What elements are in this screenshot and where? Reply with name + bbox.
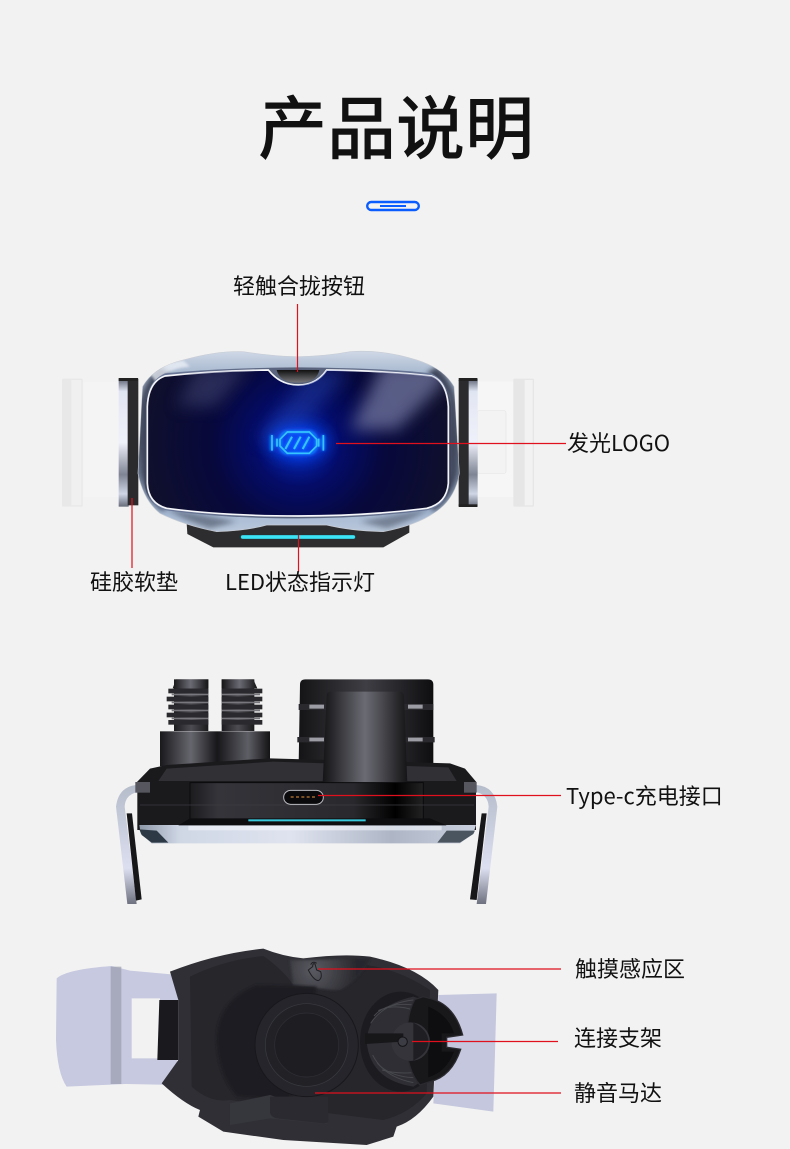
USB Type-C port — [284, 790, 323, 804]
product: back view — [56, 949, 497, 1145]
top bevel — [158, 762, 457, 781]
left clamp — [56, 966, 178, 1087]
glass reflections — [178, 370, 446, 440]
inner body plane — [190, 956, 430, 1120]
body neck — [217, 985, 317, 1100]
line: Type-c — [318, 794, 561, 796]
label: logo: 发光LOGO — [567, 426, 670, 458]
right clip arm — [464, 782, 497, 904]
threaded connector — [360, 992, 463, 1092]
left pad strip — [157, 1000, 178, 1060]
line: LED indicator — [298, 535, 300, 572]
label: connection: 连接支架 — [574, 1021, 662, 1053]
left clip arm — [116, 782, 150, 904]
touch ridge — [290, 958, 370, 990]
LED indicator strip — [241, 535, 355, 539]
label: silicone pad: 硅胶软垫 — [90, 565, 178, 597]
line: touch button — [296, 304, 298, 372]
right clamp — [433, 993, 497, 1112]
product: side view — [116, 679, 497, 904]
line: silicone pad — [131, 498, 133, 568]
title: 产品说明 — [258, 73, 534, 173]
touch close button — [277, 370, 319, 383]
line: connection — [412, 1040, 558, 1042]
panel seam — [140, 804, 474, 806]
title accent icon — [367, 202, 419, 210]
front cylinder — [323, 692, 407, 783]
left soft pad — [119, 378, 138, 507]
glowing LOGO icon — [270, 427, 327, 459]
touch icon — [308, 962, 321, 981]
post collar — [160, 731, 270, 766]
silver body shell — [138, 351, 459, 532]
left white clamp — [62, 379, 120, 507]
right white clamp — [477, 379, 534, 507]
shell dark rim — [145, 367, 451, 518]
body top — [137, 758, 476, 830]
threaded posts — [167, 679, 262, 731]
black base with indicator — [187, 523, 409, 547]
label: touch area: 触摸感应区 — [575, 952, 685, 984]
body shell — [162, 949, 438, 1145]
label: LED indicator: LED状态指示灯 — [225, 565, 375, 597]
label: touch button: 轻触合拢按钮 — [233, 269, 365, 301]
line: motor — [315, 1092, 561, 1094]
shell chrome shading — [139, 361, 457, 528]
rear cylinder — [297, 679, 435, 763]
lower tab — [230, 1095, 328, 1125]
round magnet cap — [255, 993, 358, 1097]
label: Type-c: Type-c充电接口 — [566, 779, 723, 811]
label: motor: 静音马达 — [574, 1076, 662, 1108]
silver bottom — [139, 818, 476, 843]
line: touch area — [318, 968, 561, 970]
callout lines — [132, 304, 566, 1093]
cyan indicator line — [248, 819, 366, 821]
product: front view — [62, 351, 534, 547]
right soft pad — [459, 378, 478, 507]
clamp fold — [111, 967, 121, 1084]
line: logo — [336, 442, 566, 444]
front panel — [190, 783, 423, 823]
glass screen — [147, 363, 448, 516]
